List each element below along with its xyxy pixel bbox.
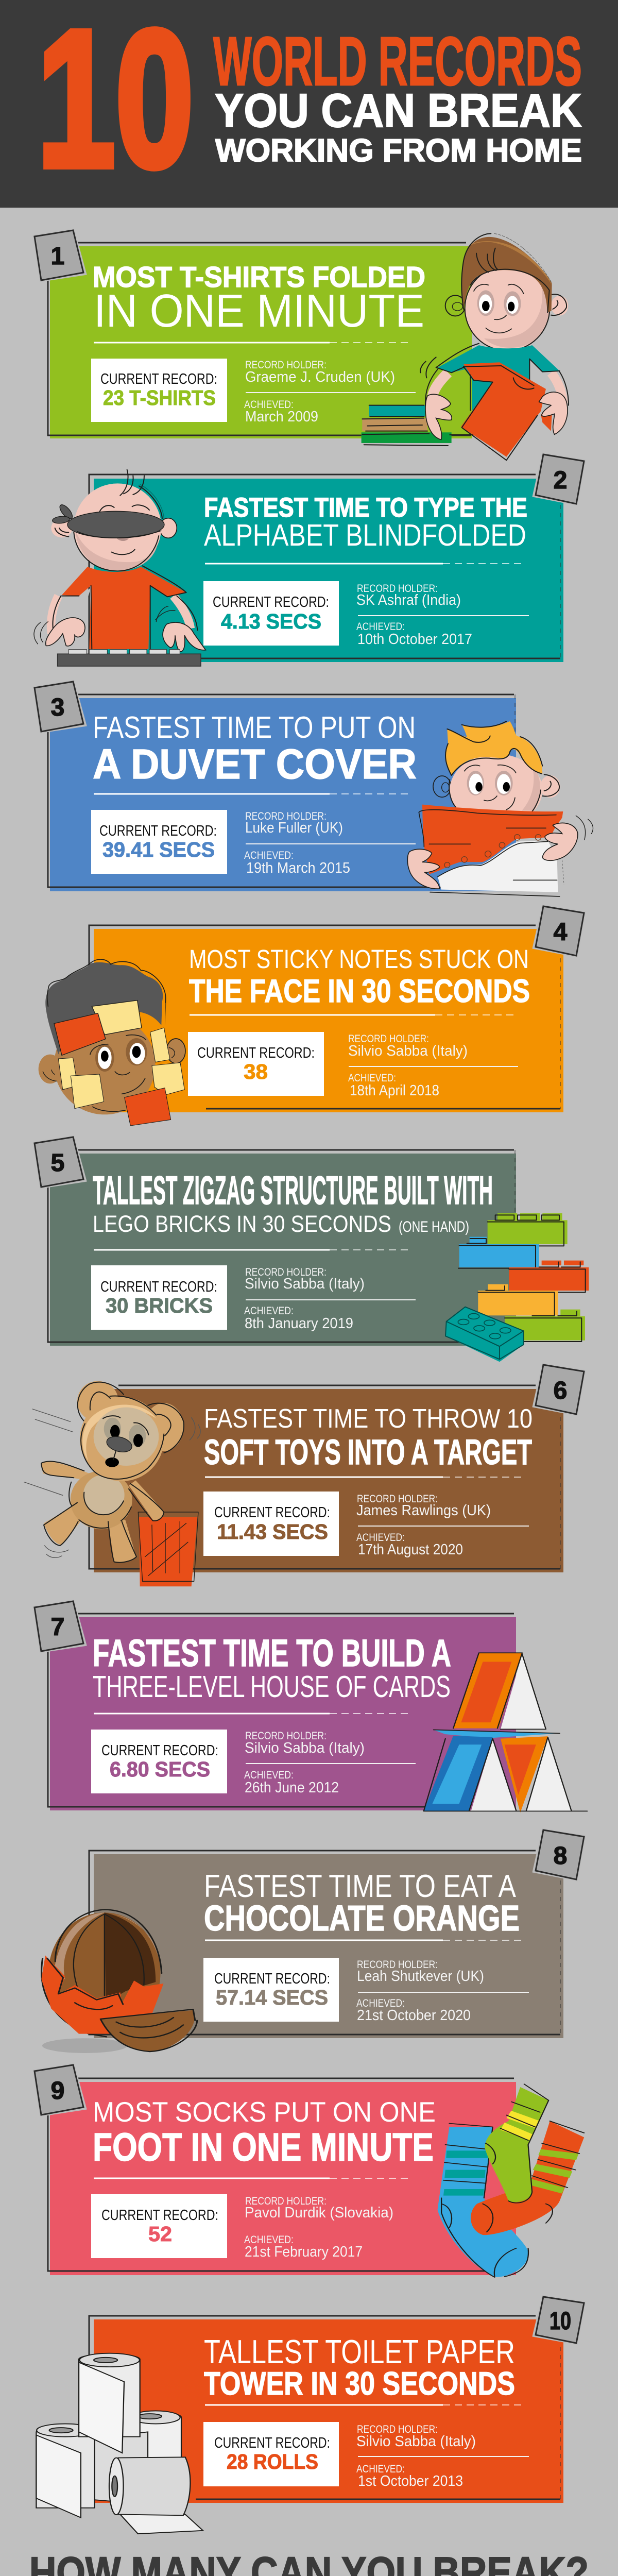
current record box 2: 4.13 SECS — [221, 609, 321, 633]
record details 3: RECORD HOLDER: — [245, 810, 327, 822]
heading 10: TOWER IN 30 SECONDS — [204, 2366, 515, 2402]
heading 6: FASTEST TIME TO THROW 10 — [204, 1404, 533, 1434]
panel 1: t-shirts — [35, 230, 569, 460]
record details 9: 21st February 2017 — [245, 2244, 363, 2260]
heading 7: THREE-LEVEL HOUSE OF CARDS — [93, 1670, 451, 1704]
current record box 1 — [91, 359, 227, 422]
panel 4: sticky notes — [39, 906, 584, 1126]
current record box 9: CURRENT RECORD: — [101, 2207, 218, 2224]
record details 6: 17th August 2020 — [358, 1541, 463, 1558]
current record box 10: 28 ROLLS — [227, 2450, 318, 2473]
badge 4 — [534, 906, 584, 956]
badge 5: 5 — [51, 1149, 64, 1177]
record details 8: RECORD HOLDER: — [357, 1959, 438, 1971]
heading 7: FASTEST TIME TO BUILD A — [93, 1632, 451, 1674]
heading 1 — [93, 261, 425, 337]
badge 4: 4 — [554, 919, 568, 946]
badge 6 — [534, 1365, 584, 1414]
illustration: lego bricks — [445, 1213, 589, 1362]
badge 10 — [534, 2297, 584, 2343]
illustration: toilet rolls — [36, 2353, 203, 2534]
current record box 10: CURRENT RECORD: — [214, 2435, 330, 2451]
badge 10: 10 — [550, 2308, 571, 2335]
current record box 5: 30 BRICKS — [106, 1294, 213, 1317]
current record box 6 — [203, 1492, 339, 1556]
panel 10: toilet paper — [36, 2297, 584, 2534]
current record box 3: 39.41 SECS — [102, 838, 215, 861]
record details 10: 1st October 2013 — [358, 2473, 463, 2489]
heading 2 — [204, 493, 527, 552]
current record box 8: CURRENT RECORD: — [214, 1971, 330, 1987]
panel 7: house of cards — [35, 1601, 587, 1812]
record details 4: ACHIEVED: — [348, 1072, 396, 1084]
heading 6 — [204, 1404, 533, 1472]
current record box 4: CURRENT RECORD: — [197, 1045, 315, 1061]
record details 10: Silvio Sabba (Italy) — [356, 2433, 476, 2450]
badge 8 — [534, 1830, 584, 1879]
panel 8: chocolate orange — [41, 1830, 584, 2053]
record details 6: ACHIEVED: — [356, 1532, 405, 1544]
badge 1: 1 — [51, 243, 64, 270]
heading 9: MOST SOCKS PUT ON ONE — [93, 2096, 436, 2128]
heading 5: (ONE HAND) — [399, 1218, 469, 1235]
panel 9: socks — [35, 2065, 584, 2277]
current record box 7: CURRENT RECORD: — [101, 1742, 218, 1759]
record details 6 — [356, 1493, 529, 1558]
badge 9 — [35, 2065, 85, 2115]
heading 8 — [204, 1869, 520, 1938]
current record box 1: 23 T-SHIRTS — [103, 386, 216, 410]
current record box 8: 57.14 SECS — [216, 1986, 328, 2009]
record details 4: RECORD HOLDER: — [348, 1033, 429, 1045]
record details 4: Silvio Sabba (Italy) — [348, 1043, 468, 1059]
heading 4: MOST STICKY NOTES STUCK ON — [189, 944, 529, 974]
record details 7 — [244, 1730, 416, 1796]
heading 5: LEGO BRICKS IN 30 SECONDS — [93, 1211, 391, 1237]
record details 6: RECORD HOLDER: — [357, 1493, 438, 1505]
current record box 10 — [203, 2422, 339, 2486]
current record box 5 — [91, 1265, 227, 1330]
badge 5 — [35, 1137, 85, 1187]
record details 2: 10th October 2017 — [357, 631, 472, 648]
heading 3: FASTEST TIME TO PUT ON — [93, 710, 416, 744]
badge 1 — [35, 230, 85, 280]
record details 2 — [356, 583, 529, 648]
title line: you can break: YOU CAN BREAK — [215, 84, 582, 137]
current record box 8 — [203, 1958, 339, 2022]
current record box 9 — [91, 2194, 227, 2258]
current record box 4: 38 — [244, 1060, 268, 1083]
current record box 7: 6.80 SECS — [110, 1757, 210, 1781]
heading 8: CHOCOLATE ORANGE — [204, 1898, 520, 1938]
header band — [0, 0, 618, 208]
heading 9 — [93, 2096, 436, 2170]
record details 5: RECORD HOLDER: — [245, 1266, 327, 1278]
record details 7: RECORD HOLDER: — [245, 1730, 327, 1742]
current record box 6: CURRENT RECORD: — [214, 1504, 330, 1521]
record details 10: RECORD HOLDER: — [357, 2424, 438, 2435]
badge 9: 9 — [51, 2077, 64, 2105]
record details 3: ACHIEVED: — [244, 850, 294, 861]
record details 4 — [348, 1033, 518, 1099]
badge 7: 7 — [51, 1614, 64, 1641]
illustration: boy folding t-shirt — [362, 233, 569, 460]
heading 5 — [93, 1167, 493, 1237]
illustration: face with sticky notes — [39, 959, 185, 1126]
panel 2: alphabet blindfolded — [34, 454, 584, 666]
record details 1: ACHIEVED: — [244, 399, 294, 411]
record details 5: ACHIEVED: — [244, 1305, 294, 1317]
record details 1: Graeme J. Cruden (UK) — [245, 369, 395, 385]
illustration: blindfolded typist — [34, 470, 205, 666]
heading 3 — [93, 710, 417, 788]
badge 3: 3 — [51, 694, 64, 721]
current record box 5: CURRENT RECORD: — [100, 1279, 217, 1295]
badge 6: 6 — [554, 1377, 567, 1404]
record details 7: Silvio Sabba (Italy) — [245, 1740, 365, 1756]
current record box 1: CURRENT RECORD: — [100, 371, 217, 387]
record details 2: SK Ashraf (India) — [356, 592, 461, 608]
badge 2 — [534, 454, 584, 504]
illustration: boy with duvet — [407, 721, 593, 896]
heading 10: TALLEST TOILET PAPER — [204, 2333, 515, 2370]
record details 5 — [244, 1266, 416, 1332]
heading 8: FASTEST TIME TO EAT A — [204, 1869, 517, 1904]
record details 9 — [244, 2195, 393, 2260]
current record box 2: CURRENT RECORD: — [213, 594, 329, 611]
record details 8: 21st October 2020 — [357, 2007, 471, 2024]
illustration: teddy bear and basket — [24, 1381, 200, 1586]
badge 2: 2 — [554, 467, 567, 494]
record details 5: 8th January 2019 — [245, 1315, 353, 1332]
record details 8: ACHIEVED: — [356, 1997, 405, 2009]
record details 9: Pavol Durdik (Slovakia) — [245, 2205, 393, 2221]
record details 10: ACHIEVED: — [356, 2463, 405, 2475]
record details 9: RECORD HOLDER: — [245, 2195, 327, 2207]
record details 3 — [244, 810, 416, 876]
current record box 3: CURRENT RECORD: — [99, 823, 217, 839]
panel 6: soft toys — [24, 1365, 584, 1586]
current record box 9: 52 — [148, 2222, 172, 2246]
heading 4: THE FACE IN 30 SECONDS — [189, 973, 530, 1009]
current record box 7 — [91, 1730, 227, 1793]
record details 5: Silvio Sabba (Italy) — [245, 1276, 365, 1292]
record details 9: ACHIEVED: — [244, 2234, 294, 2246]
heading 10 — [204, 2333, 515, 2402]
heading 9: FOOT IN ONE MINUTE — [93, 2125, 434, 2170]
badge 8: 8 — [554, 1842, 567, 1870]
record details 8 — [356, 1959, 529, 2024]
record details 3: 19th March 2015 — [246, 860, 350, 876]
record details 7: 26th June 2012 — [245, 1780, 339, 1796]
heading 7 — [93, 1632, 451, 1704]
record details 10 — [356, 2424, 529, 2489]
current record box 2 — [203, 581, 339, 646]
record details 6: James Rawlings (UK) — [356, 1502, 491, 1519]
record details 3: Luke Fuller (UK) — [245, 820, 343, 836]
badge 7 — [35, 1601, 85, 1651]
record details 8: Leah Shutkever (UK) — [357, 1968, 484, 1985]
panel 3: duvet cover — [35, 682, 593, 896]
record details 4: 18th April 2018 — [350, 1082, 439, 1099]
record details 7: ACHIEVED: — [244, 1769, 294, 1781]
heading 2: ALPHABET BLINDFOLDED — [204, 518, 526, 552]
current record box 6: 11.43 SECS — [217, 1520, 328, 1544]
heading 1: IN ONE MINUTE — [94, 285, 424, 337]
heading 1: MOST T-SHIRTS FOLDED — [93, 261, 425, 294]
title line: working from home: WORKING FROM HOME — [215, 133, 582, 168]
badge 3 — [35, 682, 85, 732]
record details 2: RECORD HOLDER: — [357, 583, 438, 595]
record details 1: March 2009 — [245, 409, 318, 425]
illustration: chocolate orange — [41, 1910, 197, 2053]
current record box 4 — [188, 1032, 324, 1096]
heading 3: A DUVET COVER — [93, 741, 417, 788]
illustration: odd socks — [437, 2084, 584, 2277]
heading 2: FASTEST TIME TO TYPE THE — [204, 493, 527, 523]
record details 2: ACHIEVED: — [356, 621, 405, 633]
current record box 3 — [91, 810, 227, 874]
record details 1 — [244, 359, 416, 425]
panel 5: lego bricks — [35, 1137, 589, 1362]
illustration: house of cards — [424, 1653, 587, 1812]
record details 1: RECORD HOLDER: — [245, 359, 327, 371]
heading 4 — [189, 944, 530, 1009]
